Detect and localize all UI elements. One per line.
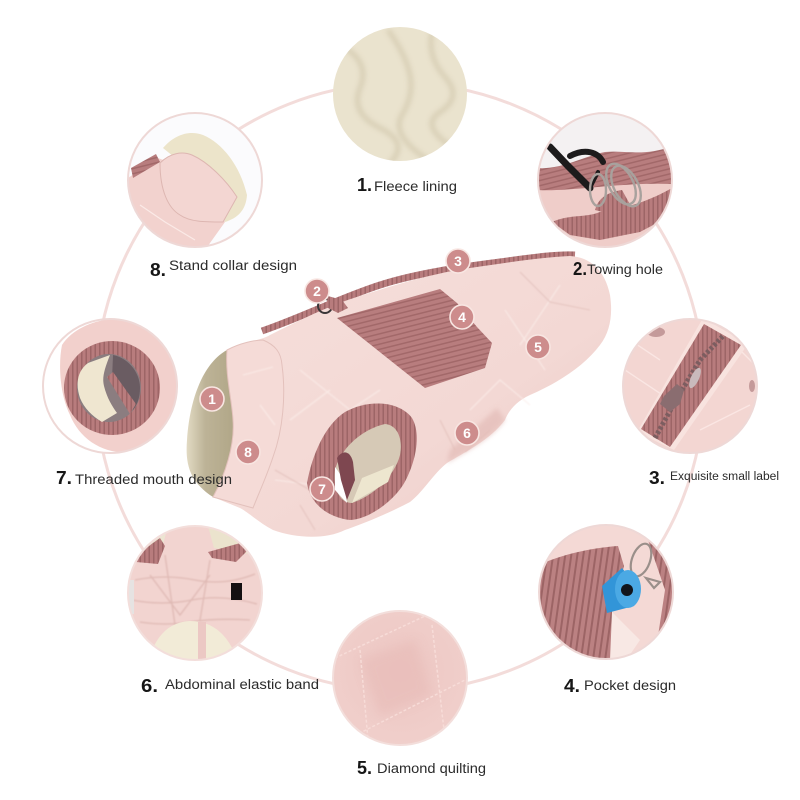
label 5 [357, 758, 486, 778]
label 5: Diamond quilting [377, 761, 486, 776]
label 6: 6. [141, 676, 158, 696]
marker 8 [236, 440, 260, 464]
label 4: Pocket design [584, 678, 676, 693]
marker 6: 6 [463, 425, 471, 441]
marker 4: 4 [458, 309, 466, 325]
circle 4: pocket design [538, 525, 676, 665]
jacket: corduroy pocket [337, 289, 492, 388]
marker 2: 2 [313, 283, 321, 299]
label 1 [357, 175, 457, 195]
label 2: 2. [573, 259, 587, 279]
circle 7: threaded mouth [43, 318, 177, 453]
marker 4 [450, 305, 474, 329]
label 5: 5. [357, 758, 372, 778]
circle 5: diamond quilting [333, 611, 467, 745]
circle 8: stand collar [128, 113, 262, 250]
marker 1 [200, 387, 224, 411]
jacket [187, 255, 611, 537]
marker 7 [310, 477, 334, 501]
jacket: belly shading [447, 408, 505, 463]
label 8 [150, 258, 297, 280]
marker 1: 1 [208, 391, 216, 407]
marker 5: 5 [534, 339, 542, 355]
jacket: leg hole ribbing [307, 403, 417, 520]
connecting ring [96, 83, 704, 691]
marker 2 [305, 279, 329, 303]
label 8: Stand collar design [169, 258, 297, 273]
circle 1: fleece lining [333, 27, 467, 163]
circle 6: abdominal elastic band [128, 526, 262, 668]
label 7: Threaded mouth design [75, 472, 232, 487]
label 1: Fleece lining [374, 179, 457, 194]
label 4 [564, 676, 676, 696]
label 7: 7. [56, 468, 72, 488]
marker 5 [526, 335, 550, 359]
label 6: Abdominal elastic band [165, 677, 319, 692]
jacket: towing loop [318, 296, 348, 313]
label 3: Exquisite small label [670, 471, 779, 483]
circle 2: towing hole [538, 113, 672, 247]
label 8: 8. [150, 260, 166, 280]
marker 6 [455, 421, 479, 445]
label 1: 1. [357, 175, 372, 195]
label 2: Towing hole [587, 262, 663, 277]
jacket: back corduroy strip [262, 255, 575, 331]
label 6 [141, 676, 319, 696]
marker 7: 7 [318, 481, 326, 497]
jacket: fleece collar lining [187, 350, 233, 497]
jacket: collar fold [213, 340, 284, 508]
label 7 [56, 468, 232, 488]
jacket: body [213, 256, 611, 537]
label 2 [573, 259, 663, 279]
jacket: quilting seams [243, 285, 560, 485]
circle 3: zipper detail [623, 318, 757, 453]
marker 8: 8 [244, 444, 252, 460]
label 4: 4. [564, 676, 580, 696]
marker 3 [446, 249, 470, 273]
jacket: leg hole interior [335, 424, 401, 503]
label 3: 3. [649, 468, 665, 488]
marker 3: 3 [454, 253, 462, 269]
label 3 [649, 468, 779, 488]
